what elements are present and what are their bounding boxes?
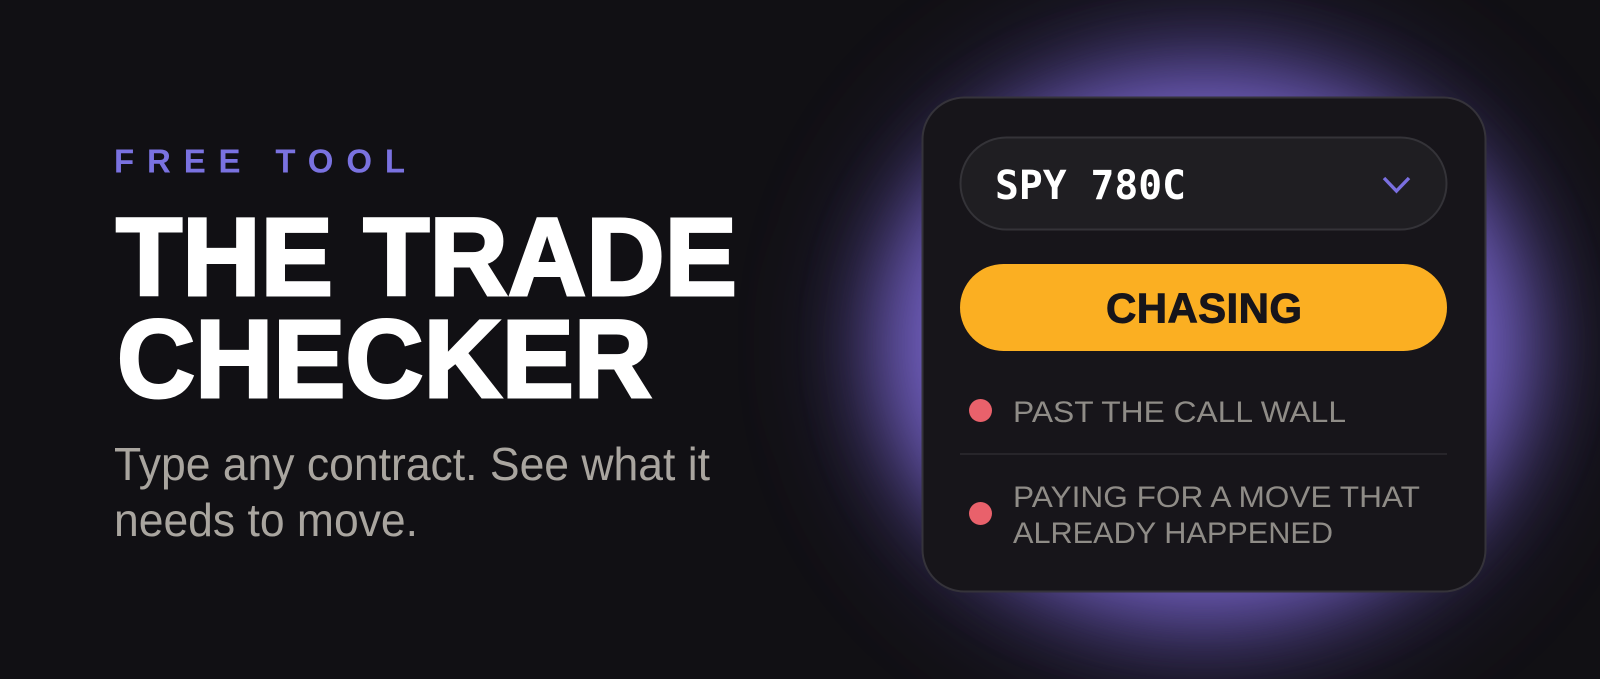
icon: red dot [969, 502, 992, 525]
eyebrow: free tool: FREE TOOL [114, 142, 405, 180]
reason text: PAYING FOR A MOVE THAT [1013, 481, 1420, 514]
subtitle: needs to move. [114, 494, 418, 546]
icon: chevron [1384, 178, 1409, 191]
reason: paying for a move [969, 481, 1420, 550]
icon: red dot [969, 399, 992, 422]
reason: past the call wall [969, 396, 1346, 429]
contract input [960, 138, 1446, 230]
title: CHECKER [117, 298, 652, 421]
status text: CHASING [1106, 285, 1302, 332]
status pill [960, 264, 1447, 351]
reason text: ALREADY HAPPENED [1013, 517, 1333, 550]
reason text [1013, 481, 1420, 550]
subtitle: Type any contract. See what it [114, 438, 710, 490]
panel: checker card [922, 98, 1486, 592]
reason text: PAST THE CALL WALL [1013, 396, 1346, 429]
subtitle [114, 438, 710, 546]
title [116, 196, 737, 421]
purple glow [854, 24, 1554, 664]
title: THE TRADE [116, 196, 737, 319]
contract text: SPY 780C [995, 163, 1186, 209]
